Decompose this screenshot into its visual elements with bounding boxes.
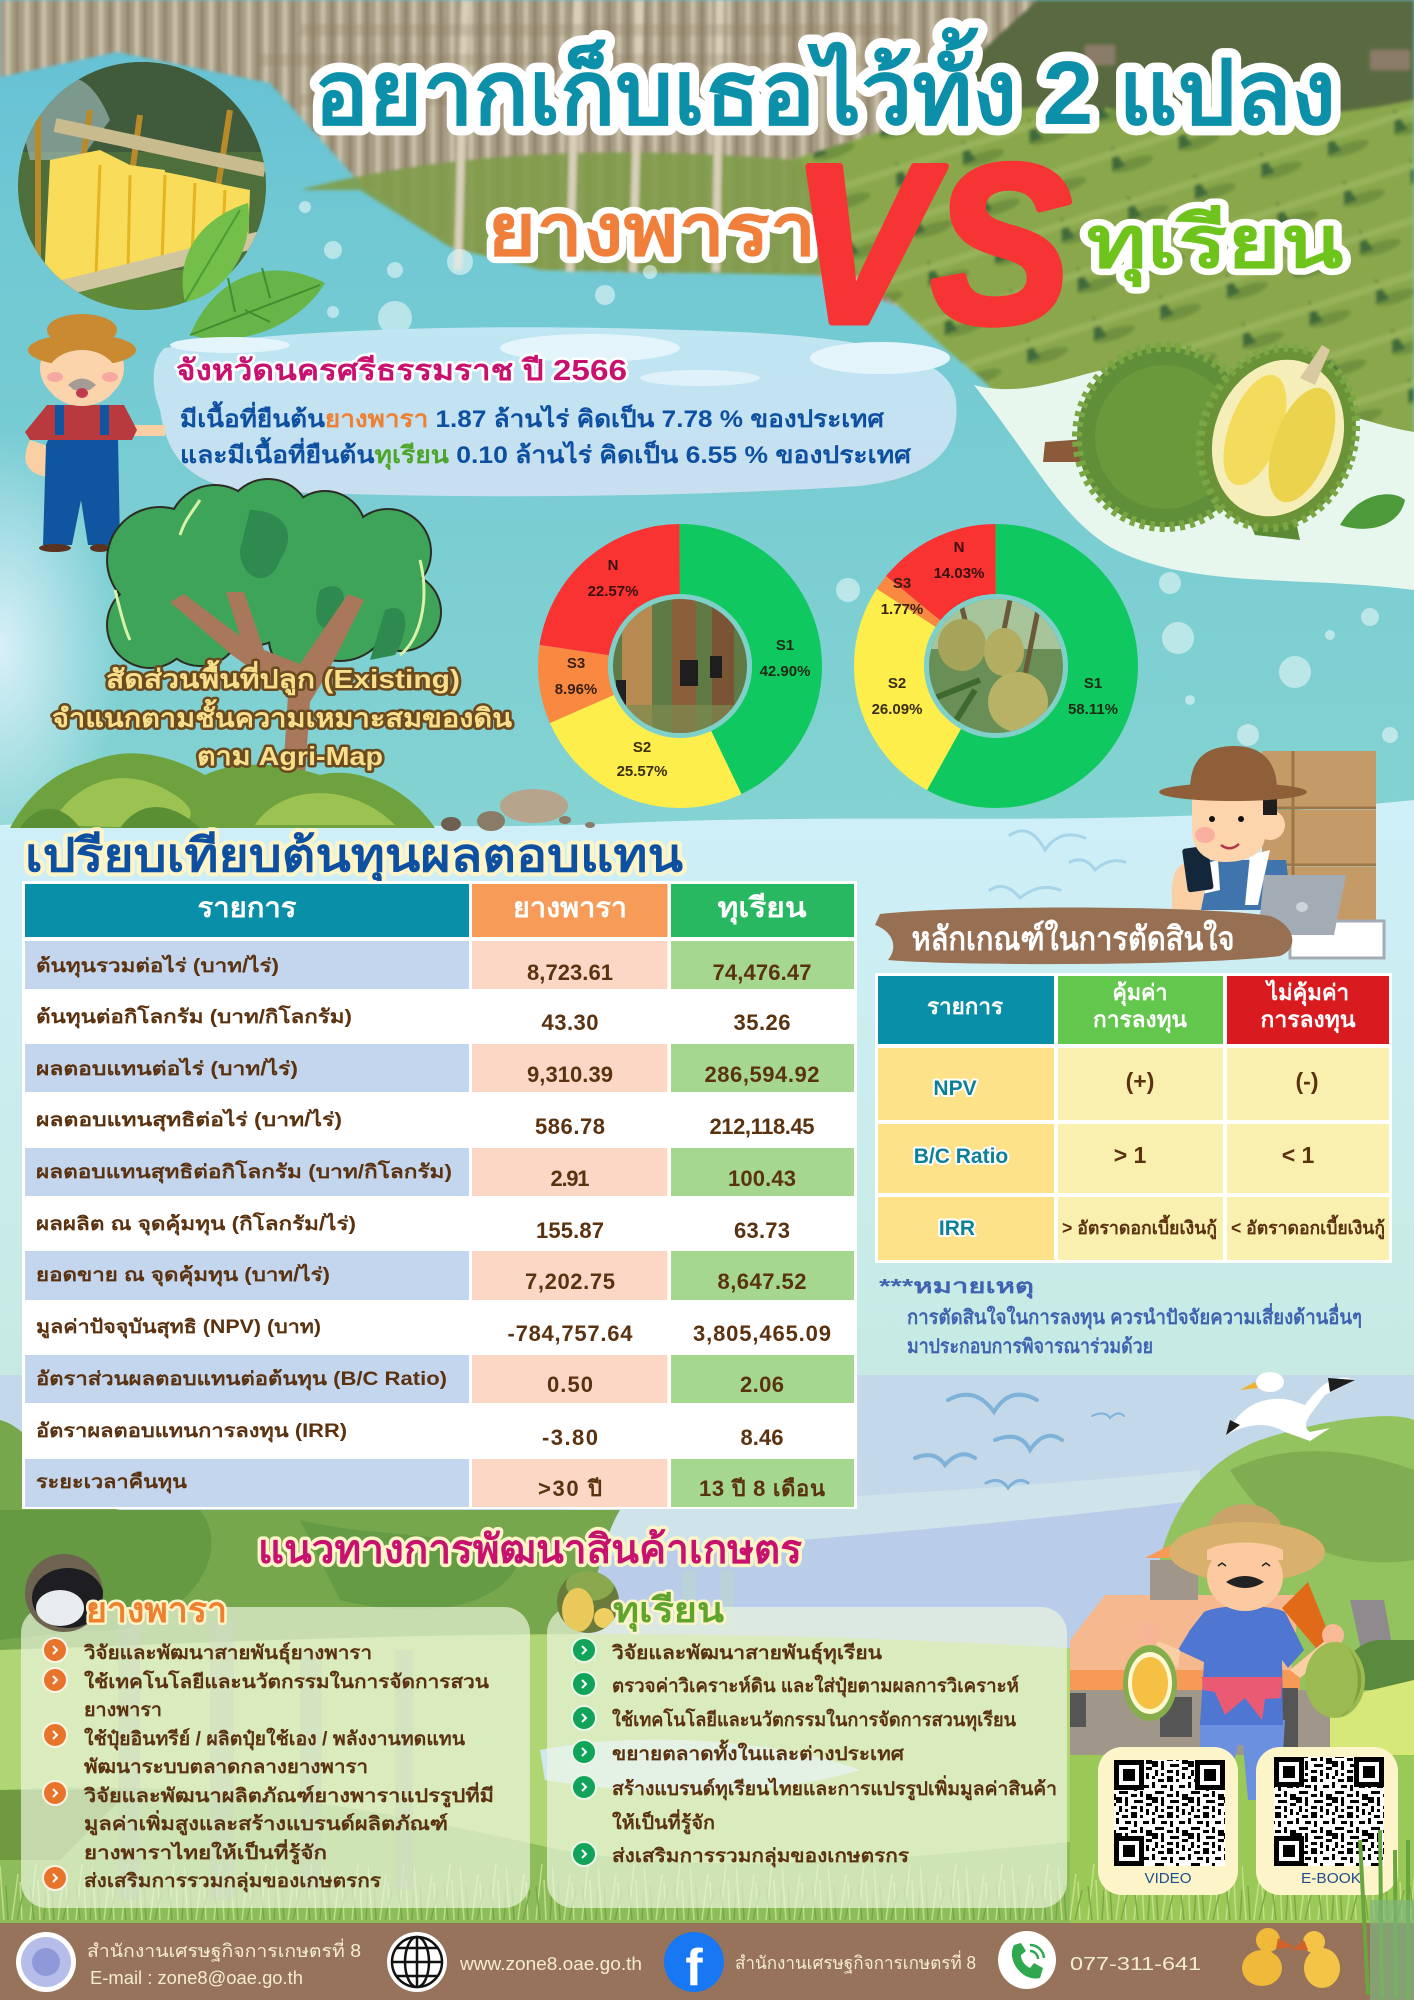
text: note: มาประกอบการพิจารณาร่วมด้วย xyxy=(907,1335,1153,1358)
footer: office seal and contact: สำนักงานเศรษฐกิจการเกษตรที่ 8 xyxy=(87,1938,361,1962)
durian list: ให้เป็นที่รู้จัก xyxy=(612,1809,715,1835)
table: durian values: 3,805,465.09 xyxy=(693,1321,831,1346)
label: N rubber: 22.57% xyxy=(588,583,638,600)
label: S3 durian: S3 xyxy=(893,575,911,592)
title: อยากเก็บเธอไว้ทั้ง 2 แปลง xyxy=(314,27,1336,144)
icon: durian xyxy=(1043,326,1405,550)
panel: province cloud xyxy=(154,327,956,496)
subtitle: rubber: ยางพารา xyxy=(488,191,816,271)
durian list: สร้างแบรนด์ทุเรียนไทยและการแปรรูปเพิ่มมูลค่าสินค้า xyxy=(612,1775,1057,1801)
table header: รายการ xyxy=(198,892,296,923)
icon: seagull xyxy=(1226,1372,1355,1441)
label: S3 rubber: 8.96% xyxy=(555,681,597,698)
text: existing area caption: จำแนกตามชั้นความเหมาะสมของดิน xyxy=(52,698,512,733)
rubber list: ใช้ปุ๋ยอินทรีย์ / ผลิตปุ๋ยใช้เอง / พลังงานทดแทน xyxy=(84,1727,465,1751)
footer: website xyxy=(387,1932,642,1992)
subtitle: durian: ทุเรียน xyxy=(1086,203,1344,288)
rubber bullet chevrons xyxy=(53,1646,57,1882)
QR card: video xyxy=(1098,1747,1238,1895)
table: row labels: ผลตอบแทนสุทธิต่อไร่ (บาท/ไร่) xyxy=(36,1108,342,1132)
rubber list: มูลค่าเพิ่มสูงและสร้างแบรนด์ผลิตภัณฑ์ xyxy=(84,1810,448,1836)
panel: comparison table xyxy=(22,881,857,1509)
table: durian values: 13 ปี 8 เดือน xyxy=(699,1476,825,1501)
table header: ยางพารา xyxy=(513,892,627,923)
icon: leaves xyxy=(183,203,325,339)
table header: ทุเรียน xyxy=(718,892,806,925)
table: durian values: 63.73 xyxy=(734,1218,790,1243)
heading: province: จังหวัดนครศรีธรรมราช ปี 2566 xyxy=(176,355,627,387)
subheading: rubber: ยางพารา xyxy=(86,1591,227,1630)
label: S1 durian: 58.11% xyxy=(1068,701,1118,718)
banner: decision criteria: หลักเกณฑ์ในการตัดสินใจ xyxy=(912,919,1234,957)
table: rubber values: 155.87 xyxy=(536,1218,604,1243)
icon: latex bowl xyxy=(24,1553,104,1633)
durian bullets xyxy=(572,1638,596,1866)
subheading: durian: ทุเรียน xyxy=(613,1591,724,1632)
footer bar xyxy=(0,1923,1414,2000)
durian list: ส่งเสริมการรวมกลุ่มของเกษตรกร xyxy=(612,1846,910,1868)
QR card: e-book xyxy=(1256,1747,1398,1895)
rubber list: ยางพาราไทยให้เป็นที่รู้จัก xyxy=(84,1839,327,1865)
decision table values: < อัตราดอกเบี้ยเงินกู้ xyxy=(1231,1214,1385,1240)
table: rubber values: 2.91 xyxy=(550,1166,590,1191)
text: existing area caption xyxy=(52,659,512,771)
table: rubber values: -3.80 xyxy=(542,1425,598,1450)
table: durian values: 286,594.92 xyxy=(704,1062,820,1087)
footer: website: www.zone8.oae.go.th xyxy=(459,1954,642,1974)
rubber bullets xyxy=(43,1638,67,1890)
icon: old farmer xyxy=(25,314,165,552)
QR card: video: VIDEO xyxy=(1144,1870,1192,1887)
table: row labels: ต้นทุนรวมต่อไร่ (บาท/ไร่) xyxy=(36,954,279,978)
photo: rubber sheets drying xyxy=(18,62,266,310)
background: distant birds xyxy=(915,831,1125,1488)
rubber list: ใช้เทคโนโลยีและนวัตกรรมในการจัดการสวน xyxy=(84,1670,489,1693)
chart: durian donut xyxy=(872,539,1118,773)
footer: office seal and contact: E-mail : zone8@oae.go.th xyxy=(90,1968,303,1988)
rubber list: ส่งเสริมการรวมกลุ่มของเกษตรกร xyxy=(84,1871,382,1893)
table: row labels: อัตราส่วนผลตอบแทนต่อต้นทุน (B/C Ratio) xyxy=(36,1368,447,1391)
durian list: ขยายตลาดทั้งในและต่างประเทศ xyxy=(612,1739,905,1765)
table: durian values: 8.46 xyxy=(740,1425,784,1450)
text: rubber area: มีเนื้อที่ยืนต้น ยางพารา 1.87 ล้านไร่ คิดเป็น 7.78 % ของประเทศ xyxy=(180,400,885,433)
durian bullet chevrons xyxy=(582,1646,586,1858)
heading: development: แนวทางการพัฒนาสินค้าเกษตร xyxy=(258,1528,803,1572)
decision table header: รายการ xyxy=(927,994,1003,1019)
label: S3 rubber: S3 xyxy=(567,655,585,672)
table: durian values: 100.43 xyxy=(728,1166,796,1191)
decision table labels: NPV xyxy=(933,1077,977,1100)
label: S1 rubber: 42.90% xyxy=(760,663,810,680)
table: row labels: มูลค่าปัจจุบันสุทธิ (NPV) (บาท) xyxy=(36,1317,321,1339)
panel: decision table xyxy=(875,973,1392,1263)
decision table values xyxy=(1062,1068,1385,1240)
table: rubber values: 586.78 xyxy=(535,1114,605,1139)
decision table values: < 1 xyxy=(1282,1142,1315,1168)
footer: office seal and contact xyxy=(16,1932,361,1992)
footer: phone: 077-311-641 xyxy=(1070,1954,1201,1974)
text: note: การตัดสินใจในการลงทุน ควรนำปัจจัยความเสี่ยงด้านอื่นๆ xyxy=(907,1302,1362,1330)
label: N durian: 14.03% xyxy=(934,565,984,582)
chart: rubber donut xyxy=(555,557,810,780)
table header xyxy=(25,884,854,937)
text: durian area: และมีเนื้อที่ยืนต้น ทุเรียน 0.10 ล้านไร่ คิดเป็น 6.55 % ของประเทศ xyxy=(180,436,912,471)
icon: grass mound xyxy=(10,753,435,828)
table: row labels: อัตราผลตอบแทนการลงทุน (IRR) xyxy=(36,1421,347,1443)
label: S2 durian: 26.09% xyxy=(872,701,922,718)
decision table header: การลงทุน xyxy=(1093,1007,1187,1034)
label: S1 rubber: S1 xyxy=(776,637,794,654)
durian list: ตรวจค่าวิเคราะห์ดิน และใส่ปุ๋ยตามผลการวิเคราะห์ xyxy=(612,1674,1019,1698)
durian list: ใช้เทคโนโลยีและนวัตกรรมในการจัดการสวนทุเรียน xyxy=(612,1708,1016,1732)
background: bubbles xyxy=(299,201,1398,746)
decision table header: คุ้มค่า xyxy=(1112,980,1168,1007)
durian list: วิจัยและพัฒนาสายพันธุ์ทุเรียน xyxy=(612,1642,882,1665)
label: S2 rubber: S2 xyxy=(633,739,651,756)
table: rubber values: -784,757.64 xyxy=(508,1321,633,1346)
label: S1 durian: S1 xyxy=(1084,675,1102,692)
background: sky and scene at bottom xyxy=(0,1375,1414,1935)
footer: facebook: สำนักงานเศรษฐกิจการเกษตรที่ 8 xyxy=(735,1950,976,1974)
decision table header: ไม่คุ้มค่า xyxy=(1265,979,1349,1007)
table: rubber values: >30 ปี xyxy=(538,1476,602,1501)
icon: cut durian xyxy=(557,1569,619,1633)
icon: tree xyxy=(108,480,440,790)
footer: facebook: f xyxy=(685,1939,703,1997)
table: rubber values: 7,202.75 xyxy=(525,1269,615,1294)
decision table values: (-) xyxy=(1296,1068,1318,1094)
rubber list: ยางพารา xyxy=(84,1700,162,1721)
decision table values: (+) xyxy=(1126,1068,1154,1094)
table: row labels: ยอดขาย ณ จุดคุ้มทุน (บาท/ไร่) xyxy=(36,1263,330,1287)
table: row labels: ผลผลิต ณ จุดคุ้มทุน (กิโลกรัม/ไร่) xyxy=(36,1212,356,1236)
table: durian values xyxy=(693,960,831,1501)
table: rubber values: 0.50 xyxy=(547,1372,593,1397)
label: S2 durian: S2 xyxy=(888,675,906,692)
label: N durian: N xyxy=(954,539,964,556)
table: durian values: 212,118.45 xyxy=(710,1114,814,1139)
table: rubber values: 8,723.61 xyxy=(527,960,613,985)
label: S3 durian: 1.77% xyxy=(881,601,923,618)
table: row labels: ผลตอบแทนต่อไร่ (บาท/ไร่) xyxy=(36,1057,298,1080)
decision table labels: B/C Ratio xyxy=(914,1145,1008,1168)
background: pale blue band xyxy=(0,800,1414,1400)
table: row labels: ระยะเวลาคืนทุน xyxy=(36,1471,187,1494)
table: rubber values xyxy=(508,960,633,1501)
table: row labels: ต้นทุนต่อกิโลกรัม (บาท/กิโลกรัม) xyxy=(36,1005,352,1029)
background: grass strip xyxy=(0,1859,1414,1923)
banner: decision criteria xyxy=(875,907,1292,964)
decision table header xyxy=(927,979,1356,1034)
table: row labels xyxy=(36,954,452,1494)
background: teal water xyxy=(0,0,1414,1000)
panel: durian development xyxy=(547,1569,1067,1908)
table: rubber values: 43.30 xyxy=(542,1010,598,1035)
rubber list: วิจัยและพัฒนาผลิตภัณฑ์ยางพาราแปรรูปที่มี xyxy=(84,1782,494,1808)
background: left glow xyxy=(0,430,120,870)
durian list xyxy=(612,1642,1057,1868)
label: S2 rubber: 25.57% xyxy=(617,763,667,780)
table: shaded rows xyxy=(25,941,854,1507)
rubber list: วิจัยและพัฒนาสายพันธุ์ยางพารา xyxy=(84,1642,372,1665)
decision table values: > 1 xyxy=(1114,1142,1147,1168)
table: durian values: 2.06 xyxy=(740,1372,784,1397)
VS: VS xyxy=(791,117,1071,370)
table: rubber values: 9,310.39 xyxy=(527,1062,613,1087)
icon: farmer with phone xyxy=(1159,746,1384,958)
photo: durians on tree xyxy=(929,599,1063,733)
icon: rocks xyxy=(441,789,595,831)
photo: rubber trees tapped xyxy=(613,590,747,735)
table: durian values: 74,476.47 xyxy=(712,960,812,985)
background: pale durian blob xyxy=(974,365,1414,590)
decision table header: การลงทุน xyxy=(1260,1007,1356,1034)
label: N rubber: N xyxy=(608,557,618,574)
icon: reeds and ducks xyxy=(1242,1830,1414,2000)
text: note: ***หมายเหตุ xyxy=(879,1276,1034,1299)
icon: farmer with durians xyxy=(1070,1504,1365,1800)
text: note xyxy=(879,1276,1362,1358)
table: durian values: 8,647.52 xyxy=(718,1269,806,1294)
table: row labels: ผลตอบแทนสุทธิต่อกิโลกรัม (บาท/กิโลกรัม) xyxy=(36,1160,452,1184)
footer: facebook xyxy=(664,1932,976,1997)
text: existing area caption: สัดส่วนพื้นที่ปลูก (Existing) xyxy=(106,659,460,696)
rubber list: พัฒนาระบบตลาดกลางยางพารา xyxy=(84,1757,368,1778)
heading: compare costs: เปรียบเทียบต้นทุนผลตอบแทน xyxy=(25,829,684,884)
text: existing area caption: ตาม Agri-Map xyxy=(197,741,383,771)
decision table labels: IRR xyxy=(939,1217,975,1240)
background: plantation photos xyxy=(0,0,1414,480)
footer: phone xyxy=(998,1931,1201,1989)
background: tree trunks behind panels xyxy=(118,1570,734,1900)
QR card: e-book: E-BOOK xyxy=(1301,1870,1361,1887)
panel: rubber development xyxy=(21,1553,530,1908)
decision table values: > อัตราดอกเบี้ยเงินกู้ xyxy=(1062,1214,1217,1240)
rubber list xyxy=(84,1642,494,1893)
table: durian values: 35.26 xyxy=(734,1010,790,1035)
decision table labels xyxy=(914,1077,1008,1240)
